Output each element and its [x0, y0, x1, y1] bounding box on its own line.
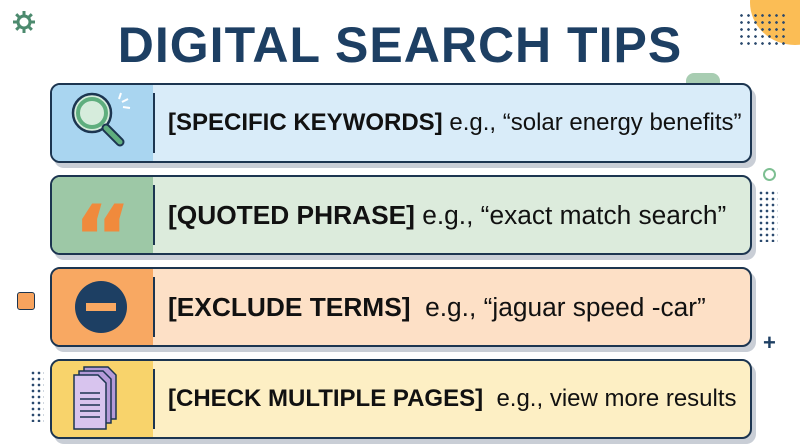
title: DIGITAL SEARCH TIPS: [118, 17, 682, 73]
decoration: orange square: [17, 292, 35, 310]
icon: magnifier: [52, 85, 153, 161]
panel: check multiple pages: [50, 359, 752, 439]
panel: quoted phrase: [50, 175, 752, 255]
text: specific keywords: [SPECIFIC KEYWORDS] e.g., “solar energy benefits”: [168, 109, 742, 136]
icon: gear: [13, 11, 35, 33]
icon: minus circle: [52, 269, 153, 345]
decoration: green pill above panel: [686, 73, 720, 85]
icon: quotes: [52, 177, 153, 253]
icon: documents: [52, 361, 153, 437]
decoration: dots left: [30, 370, 44, 422]
text: exclude terms: [EXCLUDE TERMS] e.g., “jaguar speed -car”: [168, 292, 706, 322]
panel: exclude terms: [50, 267, 752, 347]
text: check multiple pages: [CHECK MULTIPLE PAGES] e.g., view more results: [168, 385, 737, 412]
decoration: plus sign: +: [763, 330, 776, 355]
decoration: green ring: [763, 168, 776, 181]
decoration: dots top right: [738, 12, 788, 46]
text: quoted phrase: [QUOTED PHRASE] e.g., “exact match search”: [168, 200, 726, 230]
decoration: orange corner circle: [750, 0, 800, 45]
panel: specific keywords: [50, 83, 752, 163]
decoration: dots right: [758, 190, 778, 242]
